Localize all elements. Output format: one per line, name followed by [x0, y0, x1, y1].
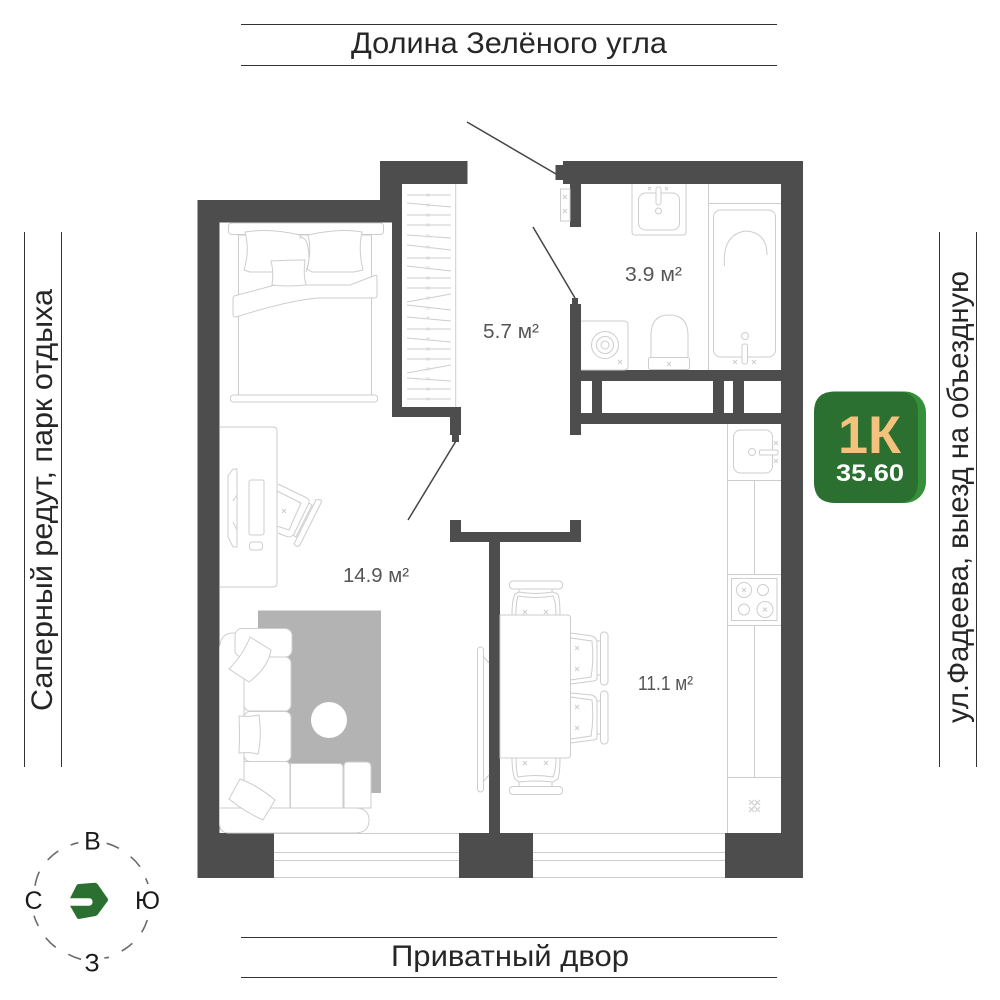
desk with monitor and keyboard — [220, 427, 277, 587]
apartment type badge: 35.60 — [836, 460, 904, 487]
area label: kitchen: 11.1 м² — [638, 673, 693, 695]
area label: living room: 14.9 м² — [343, 565, 409, 587]
TV on partition — [478, 647, 489, 792]
rug and coffee table — [258, 610, 381, 793]
kitchen sink — [734, 430, 778, 473]
dining table — [500, 615, 570, 758]
kitchen utility marks — [749, 800, 760, 812]
title: south side label: Приватный двор — [391, 940, 629, 973]
compass: Ю — [135, 887, 160, 915]
compass: В — [84, 828, 101, 856]
title: west side label: Саперный редут, парк отдыха — [26, 289, 59, 711]
kitchen counter — [727, 424, 781, 833]
title: east side label: ул.Фадеева, выезд на объездную — [942, 271, 975, 723]
dining chairs — [510, 581, 608, 794]
washing machine — [581, 321, 628, 370]
area label: bathroom: 3.9 м² — [625, 264, 682, 286]
toilet — [648, 315, 690, 370]
stove — [732, 578, 777, 620]
bathtub — [708, 184, 781, 370]
wardrobe — [407, 184, 456, 407]
compass: С — [24, 887, 43, 915]
apartment type badge — [814, 392, 926, 503]
windows — [274, 834, 725, 878]
compass: З — [84, 950, 100, 978]
bathroom sink — [632, 184, 686, 235]
bed — [228, 223, 384, 402]
walls — [198, 161, 803, 878]
area label: hallway: 5.7 м² — [483, 321, 539, 343]
desk chair — [277, 484, 322, 546]
small service box by bathroom door — [560, 189, 570, 221]
compass — [24, 828, 160, 978]
apartment type badge: 1К — [838, 406, 902, 465]
door swing lines — [408, 122, 575, 520]
corner sofa — [220, 628, 371, 833]
title: north side label: Долина Зелёного угла — [351, 27, 667, 60]
